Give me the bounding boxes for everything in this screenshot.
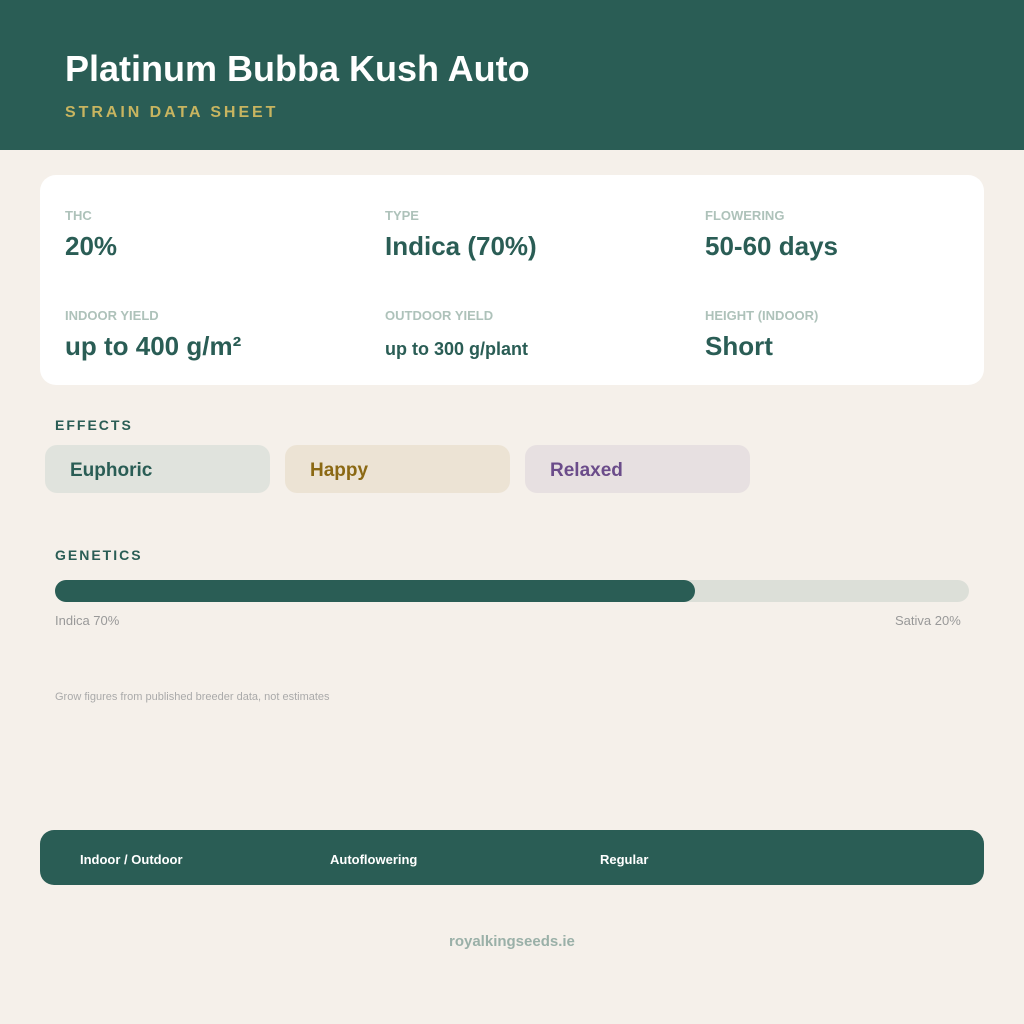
stat: height — [705, 308, 818, 361]
stat: outdoor yield: up to 300 g/plant — [385, 339, 528, 359]
stat: THC: 20% — [65, 231, 117, 261]
stat: outdoor yield: OUTDOOR YIELD — [385, 308, 493, 323]
stat: indoor yield — [65, 308, 241, 361]
tag: seed type: Regular — [600, 852, 648, 866]
tag: environment: Indoor / Outdoor — [80, 852, 183, 866]
footer bar: attributes — [40, 830, 984, 885]
tag: autoflowering: Autoflowering — [330, 852, 417, 866]
stat: height: HEIGHT (INDOOR) — [705, 308, 818, 323]
stat: indoor yield: up to 400 g/m² — [65, 331, 241, 361]
stat: indoor yield: INDOOR YIELD — [65, 308, 159, 323]
heading: genetics: GENETICS — [55, 547, 143, 563]
effect: relaxed: Relaxed — [550, 460, 623, 480]
effect: euphoric — [45, 445, 270, 493]
chart: genetics bar — [55, 580, 969, 602]
stat: type: TYPE — [385, 208, 419, 223]
title: Platinum Bubba Kush Auto — [65, 48, 530, 89]
website: royalkingseeds.ie — [449, 932, 575, 950]
heading: effects: EFFECTS — [55, 417, 133, 433]
effect: euphoric: Euphoric — [70, 460, 152, 480]
stat: type — [385, 208, 537, 261]
label: sativa: Sativa 20% — [895, 613, 961, 628]
effect: happy — [285, 445, 510, 493]
indica fill — [55, 580, 695, 602]
stat: THC — [65, 208, 117, 261]
stat: outdoor yield — [385, 308, 528, 359]
stat: type: Indica (70%) — [385, 231, 537, 261]
header band — [0, 0, 1024, 150]
label: indica: Indica 70% — [55, 613, 119, 628]
stat: height: Short — [705, 331, 773, 361]
effect: relaxed — [525, 445, 750, 493]
stat: flowering — [705, 208, 838, 261]
stat: flowering: 50-60 days — [705, 231, 838, 261]
panel: strain stats — [40, 175, 984, 385]
subtitle: STRAIN DATA SHEET — [65, 104, 278, 121]
stat: THC: THC — [65, 208, 92, 223]
source note: Grow figures from published breeder data, not estimates — [55, 691, 330, 703]
stat: flowering: FLOWERING — [705, 208, 784, 223]
effect: happy: Happy — [310, 460, 368, 480]
